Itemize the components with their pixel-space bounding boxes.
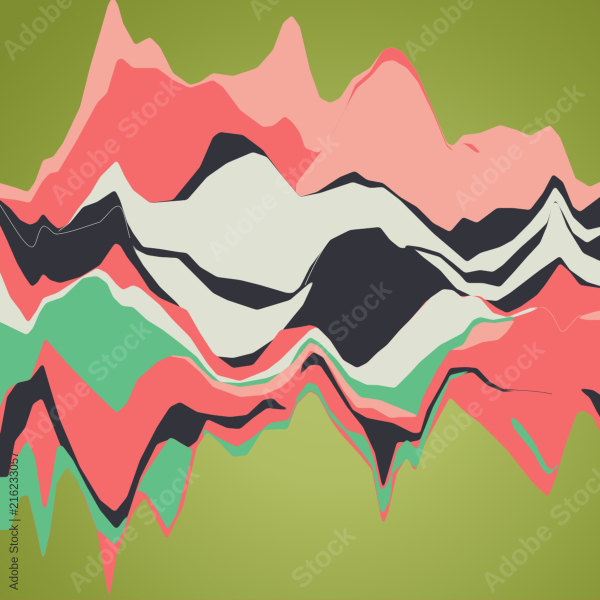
thin line over central blob [305, 227, 362, 285]
layer: green right tail [510, 415, 559, 475]
layer: central dark blob [40, 190, 472, 420]
layer: salmon right tail [575, 310, 600, 320]
watermarks: Adobe Stock [446, 76, 591, 217]
layer: red lower mass [0, 300, 600, 600]
watermarks: Adobe Stock [253, 273, 398, 414]
image id caption: Adobe Stock | #216233057 [9, 451, 21, 590]
layer: right pale strip [405, 202, 600, 420]
layer: green lower left [0, 437, 193, 562]
layer: pale wedge [128, 236, 315, 358]
layer: main pale band [58, 152, 600, 500]
layer: dark right patch [578, 388, 600, 425]
thin dark tail [505, 389, 552, 394]
layer: salmon right mass [296, 60, 600, 320]
layer: salmon thin band [170, 342, 417, 440]
watermarks: Adobe Stock [13, 313, 158, 454]
watermarks: Adobe Stock [200, 126, 345, 267]
layer: green lower mid [203, 370, 470, 514]
layer: red crest [0, 47, 480, 320]
layer: right lower dark strip [455, 256, 600, 345]
layer: upper dark band [0, 132, 600, 600]
thin line over upper dark band [0, 205, 130, 247]
watermarks: Stock [285, 519, 361, 594]
watermarks: Adobe Stock [406, 333, 551, 474]
thin pale line on red [540, 307, 580, 331]
layer: lower pale band [0, 258, 546, 440]
layer: lower dark band [0, 352, 530, 529]
layer: lower red band [0, 205, 600, 600]
layer: lower background silhouette [0, 391, 600, 600]
layer: right dark strip [405, 199, 600, 420]
layer: light pink top [0, 0, 600, 300]
layer: salmon right patch [450, 320, 515, 360]
layer: green mass [0, 276, 515, 460]
watermarks: Adobe Stock [43, 70, 188, 211]
watermarks: Adobe Stock [61, 457, 206, 598]
